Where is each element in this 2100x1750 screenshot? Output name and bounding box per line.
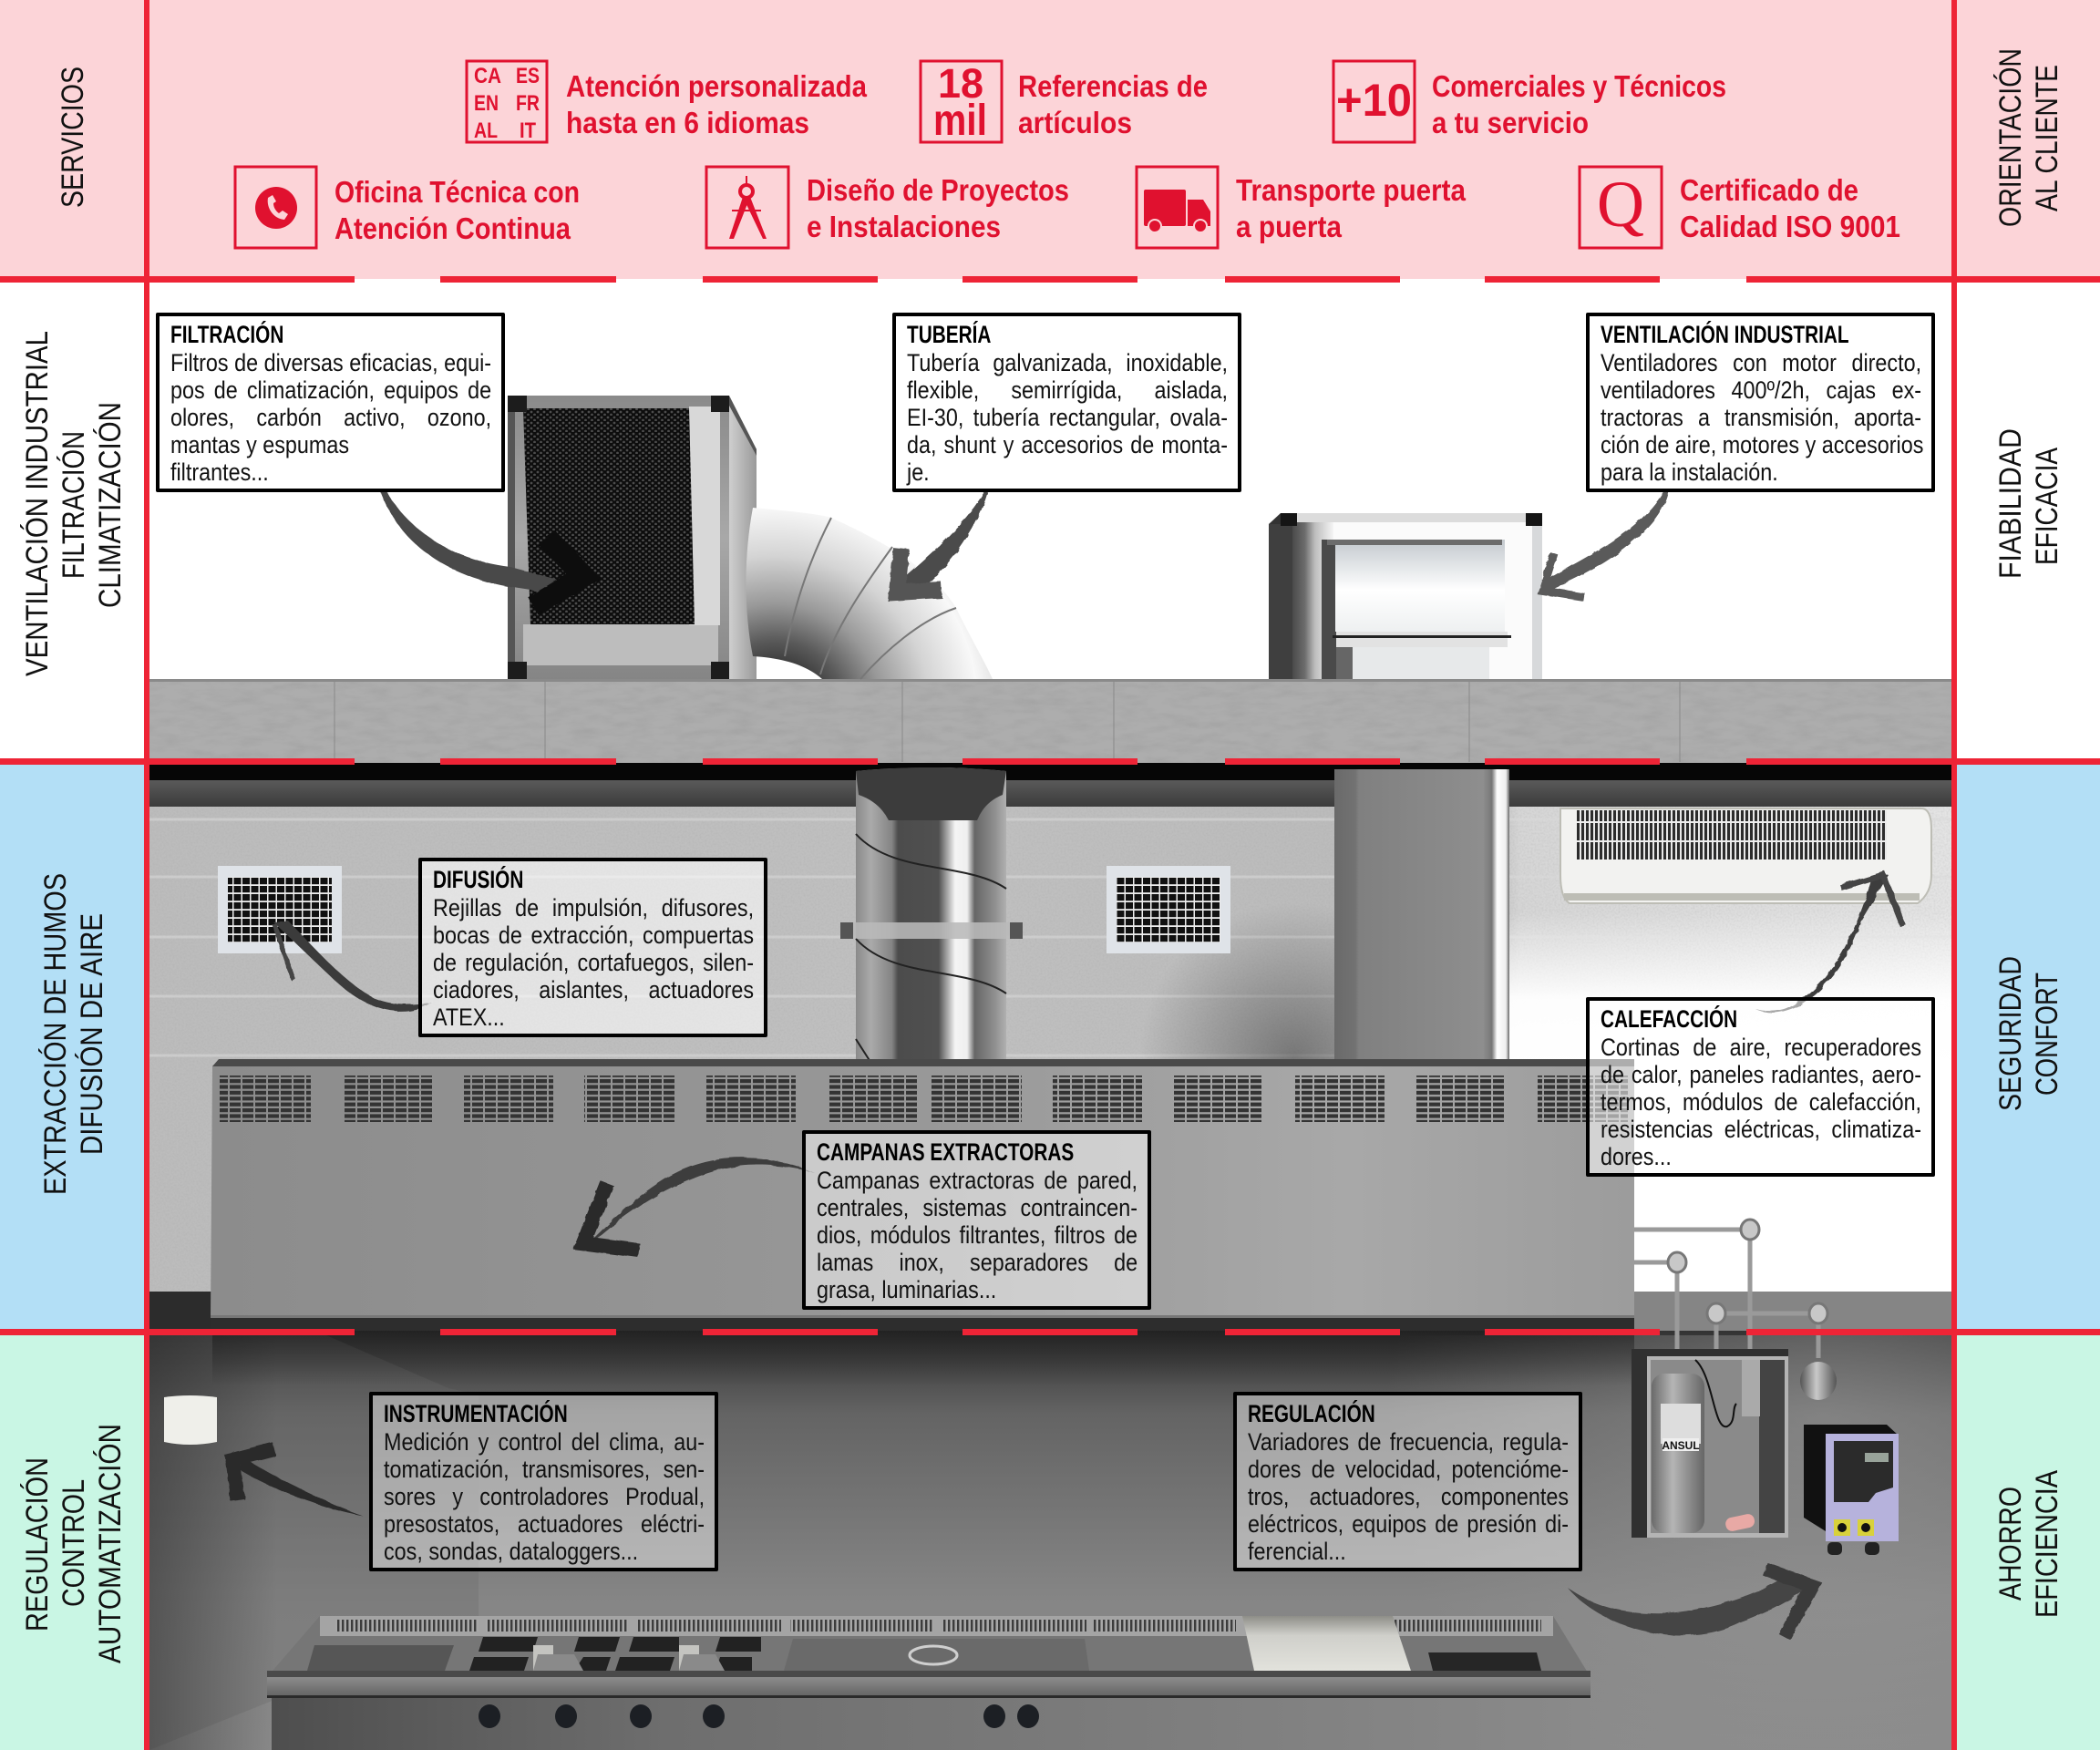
service: comerciales: a tu servicio: [1432, 106, 1589, 139]
right side labels: [1993, 48, 2064, 1618]
left side labels: VENTILACIÓN INDUSTRIAL: [20, 331, 55, 676]
service: idiomas: CA: [474, 64, 501, 88]
service: calidad: Certificado de: [1680, 173, 1858, 207]
panel: calefaccion: [1586, 997, 1935, 1177]
panel: difusion: [418, 858, 767, 1037]
arrow: tuberia: [897, 480, 991, 597]
left side labels: CLIMATIZACIÓN: [93, 402, 128, 608]
text block: lamas inox, separadores de: [817, 1249, 1138, 1276]
stove vents: [335, 1620, 1541, 1632]
panel: filtracion: [156, 313, 505, 492]
left side labels: REGULACIÓN: [20, 1457, 55, 1632]
icon: truck: [1144, 190, 1210, 232]
service: idiomas: [467, 61, 868, 143]
text block: ción de aire, motores y accesorios: [1601, 431, 1923, 458]
text block: Campanas extractoras de pared,: [817, 1167, 1138, 1194]
panel: ventilacion industrial: [1586, 313, 1935, 492]
panel: regulacion: [1233, 1392, 1582, 1571]
heading: TUBERÍA: [907, 321, 991, 348]
text block: [1601, 1034, 1921, 1170]
service: idiomas: FR: [516, 91, 540, 116]
service: calidad: Q: [1597, 168, 1644, 241]
text block: dores...: [1601, 1143, 1672, 1170]
text block: de regulación, cortafuegos, silen-: [433, 949, 754, 976]
text block: [817, 1167, 1138, 1303]
text block: filtrantes...: [170, 458, 269, 486]
right side labels: CONFORT: [2030, 973, 2064, 1096]
text block: [433, 894, 754, 1031]
griddle plates: [307, 1616, 1541, 1671]
arrow: regulacion: [1568, 1570, 1814, 1637]
left column colour bands: [0, 0, 146, 1750]
arrow: filtracion: [372, 447, 583, 606]
elbow duct: [746, 508, 993, 679]
arrow: ventilacion industrial: [1540, 480, 1669, 597]
text block: tros, actuadores, componentes: [1248, 1483, 1569, 1510]
arrow: difusion: [273, 921, 431, 1011]
service: referencias: 18: [938, 60, 983, 107]
right side labels: EFICACIA: [2030, 448, 2064, 565]
text block: Filtros de diversas eficacias, equi-: [170, 349, 491, 376]
air curtain heater: [1560, 808, 1931, 903]
wall pipes: [1634, 1220, 1827, 1358]
text block: ferencial...: [1248, 1538, 1346, 1565]
panel: regulation background wall: [146, 1331, 1954, 1750]
text block: pos de climatización, equipos de: [170, 376, 491, 404]
text block: [170, 349, 491, 486]
text block: [1248, 1428, 1569, 1565]
service: comerciales: +10: [1336, 75, 1412, 126]
cooking range: [267, 1616, 1590, 1750]
heading: DIFUSIÓN: [433, 866, 523, 893]
arrow: instrumentacion: [232, 1449, 363, 1516]
text block: tractoras a transmisión, aporta-: [1601, 404, 1921, 431]
heading: INSTRUMENTACIÓN: [384, 1400, 568, 1427]
heading: FILTRACIÓN: [170, 321, 283, 348]
service: oficina tecnica: Atención Continua: [335, 211, 571, 245]
text block: Medición y control del clima, au-: [384, 1428, 705, 1456]
filter cabinet: [508, 396, 757, 679]
control knobs: [479, 1704, 1039, 1728]
right side labels: FIABILIDAD: [1993, 428, 2028, 579]
right side labels: AHORRO: [1993, 1487, 2028, 1601]
extraction hood: [211, 1059, 1634, 1318]
service: oficina tecnica: [235, 167, 580, 248]
service: idiomas: EN: [474, 91, 499, 116]
service: oficina tecnica: Oficina Técnica con: [335, 175, 580, 209]
ventilation grille left: [218, 866, 342, 953]
service: calidad: [1580, 167, 1900, 248]
service: comerciales: [1333, 61, 1726, 142]
text block: bocas de extracción, compuertas: [433, 921, 754, 949]
left side labels: SERVICIOS: [56, 67, 90, 208]
service: transporte: [1137, 167, 1467, 248]
text block: ciadores, aislantes, actuadores: [433, 976, 754, 1004]
right side labels: AL CLIENTE: [2030, 65, 2064, 211]
gas burners: [469, 1637, 761, 1671]
text block: EI-30, tubería rectangular, ovala-: [907, 404, 1228, 431]
text block: tomatización, transmisores, sen-: [384, 1456, 705, 1483]
text block: flexible, semirrígida, aislada,: [907, 376, 1228, 404]
heading: CAMPANAS EXTRACTORAS: [817, 1138, 1074, 1166]
heading: REGULACIÓN: [1248, 1400, 1375, 1427]
left side labels: DIFUSIÓN DE AIRE: [75, 913, 109, 1155]
text block: ATEX...: [433, 1004, 505, 1031]
left side labels: AUTOMATIZACIÓN: [93, 1424, 128, 1663]
service: referencias: mil: [933, 97, 987, 145]
service: transporte: a puerta: [1236, 210, 1343, 243]
text block: grasa, luminarias...: [817, 1276, 996, 1303]
text block: centrales, sistemas contraincen-: [817, 1194, 1138, 1221]
extinguisher cabinet: ANSUL: [1662, 1439, 1700, 1452]
service: idiomas: ES: [516, 64, 540, 88]
frequency drive: [1804, 1425, 1899, 1555]
right side labels: ORIENTACIÓN: [1993, 48, 2028, 227]
panel: ventilation background with concrete slab: [146, 279, 1954, 763]
right side labels: SEGURIDAD: [1993, 956, 2028, 1111]
service: diseno: Diseño de Proyectos: [807, 173, 1069, 207]
panel: extraction background with wall and ceiling beam: [146, 763, 1954, 1333]
right column colour bands: [1954, 0, 2100, 1750]
text block: cos, sondas, dataloggers...: [384, 1538, 638, 1565]
text block: Tubería galvanizada, inoxidable,: [907, 349, 1228, 376]
left side labels: EXTRACCIÓN DE HUMOS: [38, 873, 73, 1195]
ventilation grille centre: [1107, 866, 1230, 953]
text block: dios, módulos filtrantes, filtros de: [817, 1221, 1138, 1249]
text block: para la instalación.: [1601, 458, 1778, 486]
service: idiomas: hasta en 6 idiomas: [566, 106, 809, 139]
heading: CALEFACCIÓN: [1601, 1005, 1737, 1033]
service: referencias: Referencias de: [1018, 69, 1208, 103]
icon: compass: [729, 176, 767, 239]
service: referencias: artículos: [1018, 106, 1132, 139]
text block: Variadores de frecuencia, regula-: [1248, 1428, 1569, 1456]
service: idiomas: IT: [520, 118, 536, 143]
panel: services background: [146, 0, 1954, 279]
service: diseno: [706, 167, 1069, 248]
text block: mantas y espumas: [170, 431, 349, 458]
left side labels: CONTROL: [57, 1479, 91, 1607]
service: calidad: Calidad ISO 9001: [1680, 210, 1900, 243]
arrow: campanas extractoras: [583, 1158, 815, 1251]
round chimney duct: [840, 767, 1023, 1062]
arrow: calefaccion: [1755, 875, 1903, 1013]
service: idiomas: Atención personalizada: [566, 69, 868, 103]
text block: termos, módulos de calefacción,: [1601, 1088, 1921, 1116]
text block: eléctricos, equipos de presión di-: [1248, 1510, 1569, 1538]
panel: tuberia: [892, 313, 1241, 492]
hood slot groups: [220, 1076, 1628, 1122]
right side labels: EFICIENCIA: [2030, 1470, 2064, 1618]
panel: campanas extractoras: [802, 1130, 1151, 1310]
text block: [1601, 349, 1923, 486]
service: diseno: e Instalaciones: [807, 210, 1001, 243]
icon: phone: [255, 187, 297, 229]
text block: resistencias eléctricas, climatiza-: [1601, 1116, 1921, 1143]
left side labels: [20, 67, 128, 1663]
text block: de calor, paneles radiantes, aero-: [1601, 1061, 1921, 1088]
service: referencias: [921, 60, 1208, 145]
text block: Cortinas de aire, recuperadores: [1601, 1034, 1921, 1061]
text block: Ventiladores con motor directo,: [1601, 349, 1921, 376]
service: comerciales: Comerciales y Técnicos: [1432, 69, 1726, 103]
service: idiomas: AL: [474, 118, 498, 143]
float weight: [1800, 1362, 1837, 1400]
fan cabinet: [1269, 513, 1542, 679]
text block: da, shunt y accesorios de monta-: [907, 431, 1228, 458]
text block: [384, 1428, 705, 1565]
text block: presostatos, actuadores eléctri-: [384, 1510, 705, 1538]
text block: [906, 349, 1228, 486]
rectangular duct: [1334, 769, 1509, 1072]
panel: instrumentacion: [369, 1392, 718, 1571]
text block: dores de velocidad, potencióme-: [1248, 1456, 1569, 1483]
text block: ventiladores 400º/2h, cajas ex-: [1601, 376, 1921, 404]
extinguisher cabinet: [1632, 1349, 1788, 1538]
text block: olores, carbón activo, ozono,: [170, 404, 491, 431]
text block: Rejillas de impulsión, difusores,: [433, 894, 754, 921]
wall sensor: [164, 1395, 217, 1445]
left side labels: FILTRACIÓN: [57, 431, 91, 579]
text block: sores y controladores Produal,: [384, 1483, 705, 1510]
text block: je.: [907, 458, 930, 486]
heading: VENTILACIÓN INDUSTRIAL: [1601, 321, 1849, 348]
service: transporte: Transporte puerta: [1236, 173, 1467, 207]
